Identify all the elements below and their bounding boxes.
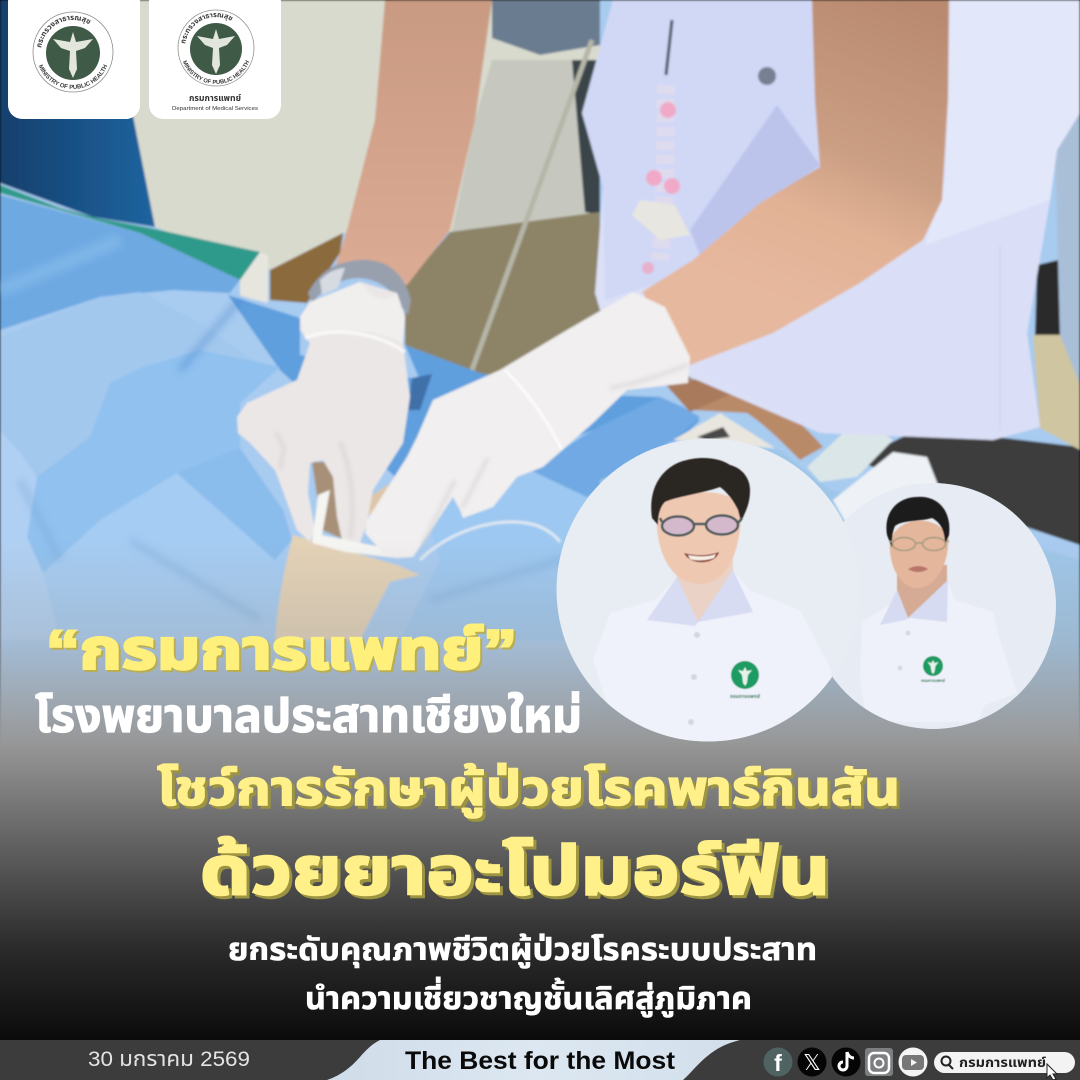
subtitle: hospital name: โรงพยาบาลประสาทเชียงใหม่ bbox=[35, 689, 582, 742]
buttons bbox=[906, 630, 910, 636]
face bbox=[657, 492, 741, 584]
collar bbox=[647, 570, 753, 626]
headline block bbox=[35, 618, 900, 1017]
lanyard and beads bbox=[666, 20, 672, 75]
seal: ministry bbox=[32, 12, 114, 92]
portrait: second doctor bbox=[810, 483, 1056, 729]
supporting line 1: ยกระดับคุณภาพชีวิตผู้ป่วยโรคระบบประสาท bbox=[228, 932, 817, 968]
right glove bbox=[365, 292, 690, 558]
seal: department: MINISTRY OF PUBLIC HEALTH bbox=[182, 60, 250, 84]
watch bbox=[308, 260, 411, 315]
badge bbox=[731, 661, 759, 689]
seal: ministry: MINISTRY OF PUBLIC HEALTH bbox=[38, 64, 108, 89]
department name: กรมการแพทย์ bbox=[189, 93, 241, 103]
badge bbox=[923, 656, 943, 676]
buttons bbox=[694, 632, 700, 638]
patient skin bbox=[275, 535, 420, 640]
seal: department bbox=[178, 10, 254, 86]
seal: department: กระทรวงสาธารณสุข bbox=[182, 13, 233, 44]
title: department of medical services: “กรมการแพทย์” bbox=[46, 618, 517, 681]
department name bbox=[172, 93, 258, 112]
supporting line 2: นำความเชี่ยวชาญชั้นเลิศสู่ภูมิภาค bbox=[305, 976, 752, 1017]
far right strip bbox=[1055, 110, 1080, 390]
icon: tiktok bbox=[832, 1048, 860, 1076]
blue sheet bbox=[0, 195, 240, 330]
glove shading bbox=[276, 365, 688, 545]
dressing bbox=[312, 490, 397, 558]
icon: youtube bbox=[898, 1048, 928, 1076]
seal: ministry: กระทรวงสาธารณสุข bbox=[37, 16, 91, 48]
dark items right bbox=[857, 428, 1080, 545]
smile bbox=[684, 552, 719, 562]
search pill: กรมการแพทย์ bbox=[959, 1055, 1046, 1070]
mouth bbox=[908, 566, 928, 572]
portrait: second doctor: กรมการแพทย์ bbox=[921, 678, 945, 683]
catheter tube bbox=[420, 522, 560, 560]
search pill bbox=[934, 1052, 1075, 1080]
shirt bbox=[606, 578, 832, 742]
baseboard bbox=[270, 233, 343, 303]
shirt bbox=[864, 618, 978, 722]
nurse forearm left bbox=[335, 0, 492, 285]
monitor bbox=[673, 413, 775, 448]
icon: instagram bbox=[865, 1048, 893, 1076]
wall bbox=[110, 0, 600, 270]
portrait: first doctor bbox=[556, 438, 860, 745]
glasses bbox=[660, 516, 742, 536]
green sheet bbox=[0, 185, 263, 280]
face bbox=[890, 521, 948, 588]
department name: Department of Medical Services bbox=[172, 106, 258, 112]
glasses bbox=[889, 538, 949, 550]
slogan band bbox=[327, 1040, 740, 1080]
icon: X: 𝕏 bbox=[803, 1050, 821, 1075]
neck bbox=[677, 555, 733, 622]
collar bbox=[880, 580, 948, 625]
chair dark blue bbox=[0, 0, 155, 227]
left glove bbox=[237, 282, 410, 545]
headline line: parkinson treatment: โชว์การรักษาผู้ป่วยโรคพาร์กินสัน bbox=[157, 762, 900, 818]
portrait: first doctor: กรมการแพทย์ bbox=[730, 694, 760, 700]
dark equipment behind bbox=[492, 0, 600, 55]
icon: facebook: f bbox=[774, 1050, 782, 1076]
headline line: apomorphine: ด้วยยาอะโปมอร์ฟีน bbox=[200, 833, 830, 909]
icon: X bbox=[798, 1048, 826, 1076]
neck bbox=[897, 565, 947, 618]
bottom dark gradient overlay bbox=[0, 540, 1080, 1040]
date: 30 มกราคม 2569 bbox=[88, 1048, 250, 1071]
slogan: The Best for the Most bbox=[405, 1047, 676, 1075]
footer bar bbox=[0, 1040, 1080, 1080]
logo card: Department of Medical Services bbox=[149, 0, 281, 119]
IV pole bbox=[472, 40, 592, 370]
nurse arm right bbox=[642, 0, 949, 365]
patient hand bbox=[670, 387, 823, 460]
hair bbox=[886, 497, 949, 548]
hair bbox=[651, 458, 750, 525]
uniform button bbox=[758, 67, 776, 85]
logo card: Ministry of Public Health bbox=[8, 0, 140, 119]
cloth folds bbox=[0, 240, 620, 620]
floor bbox=[405, 212, 700, 380]
nurse uniform bbox=[582, 0, 1080, 440]
icon: facebook bbox=[764, 1048, 792, 1076]
